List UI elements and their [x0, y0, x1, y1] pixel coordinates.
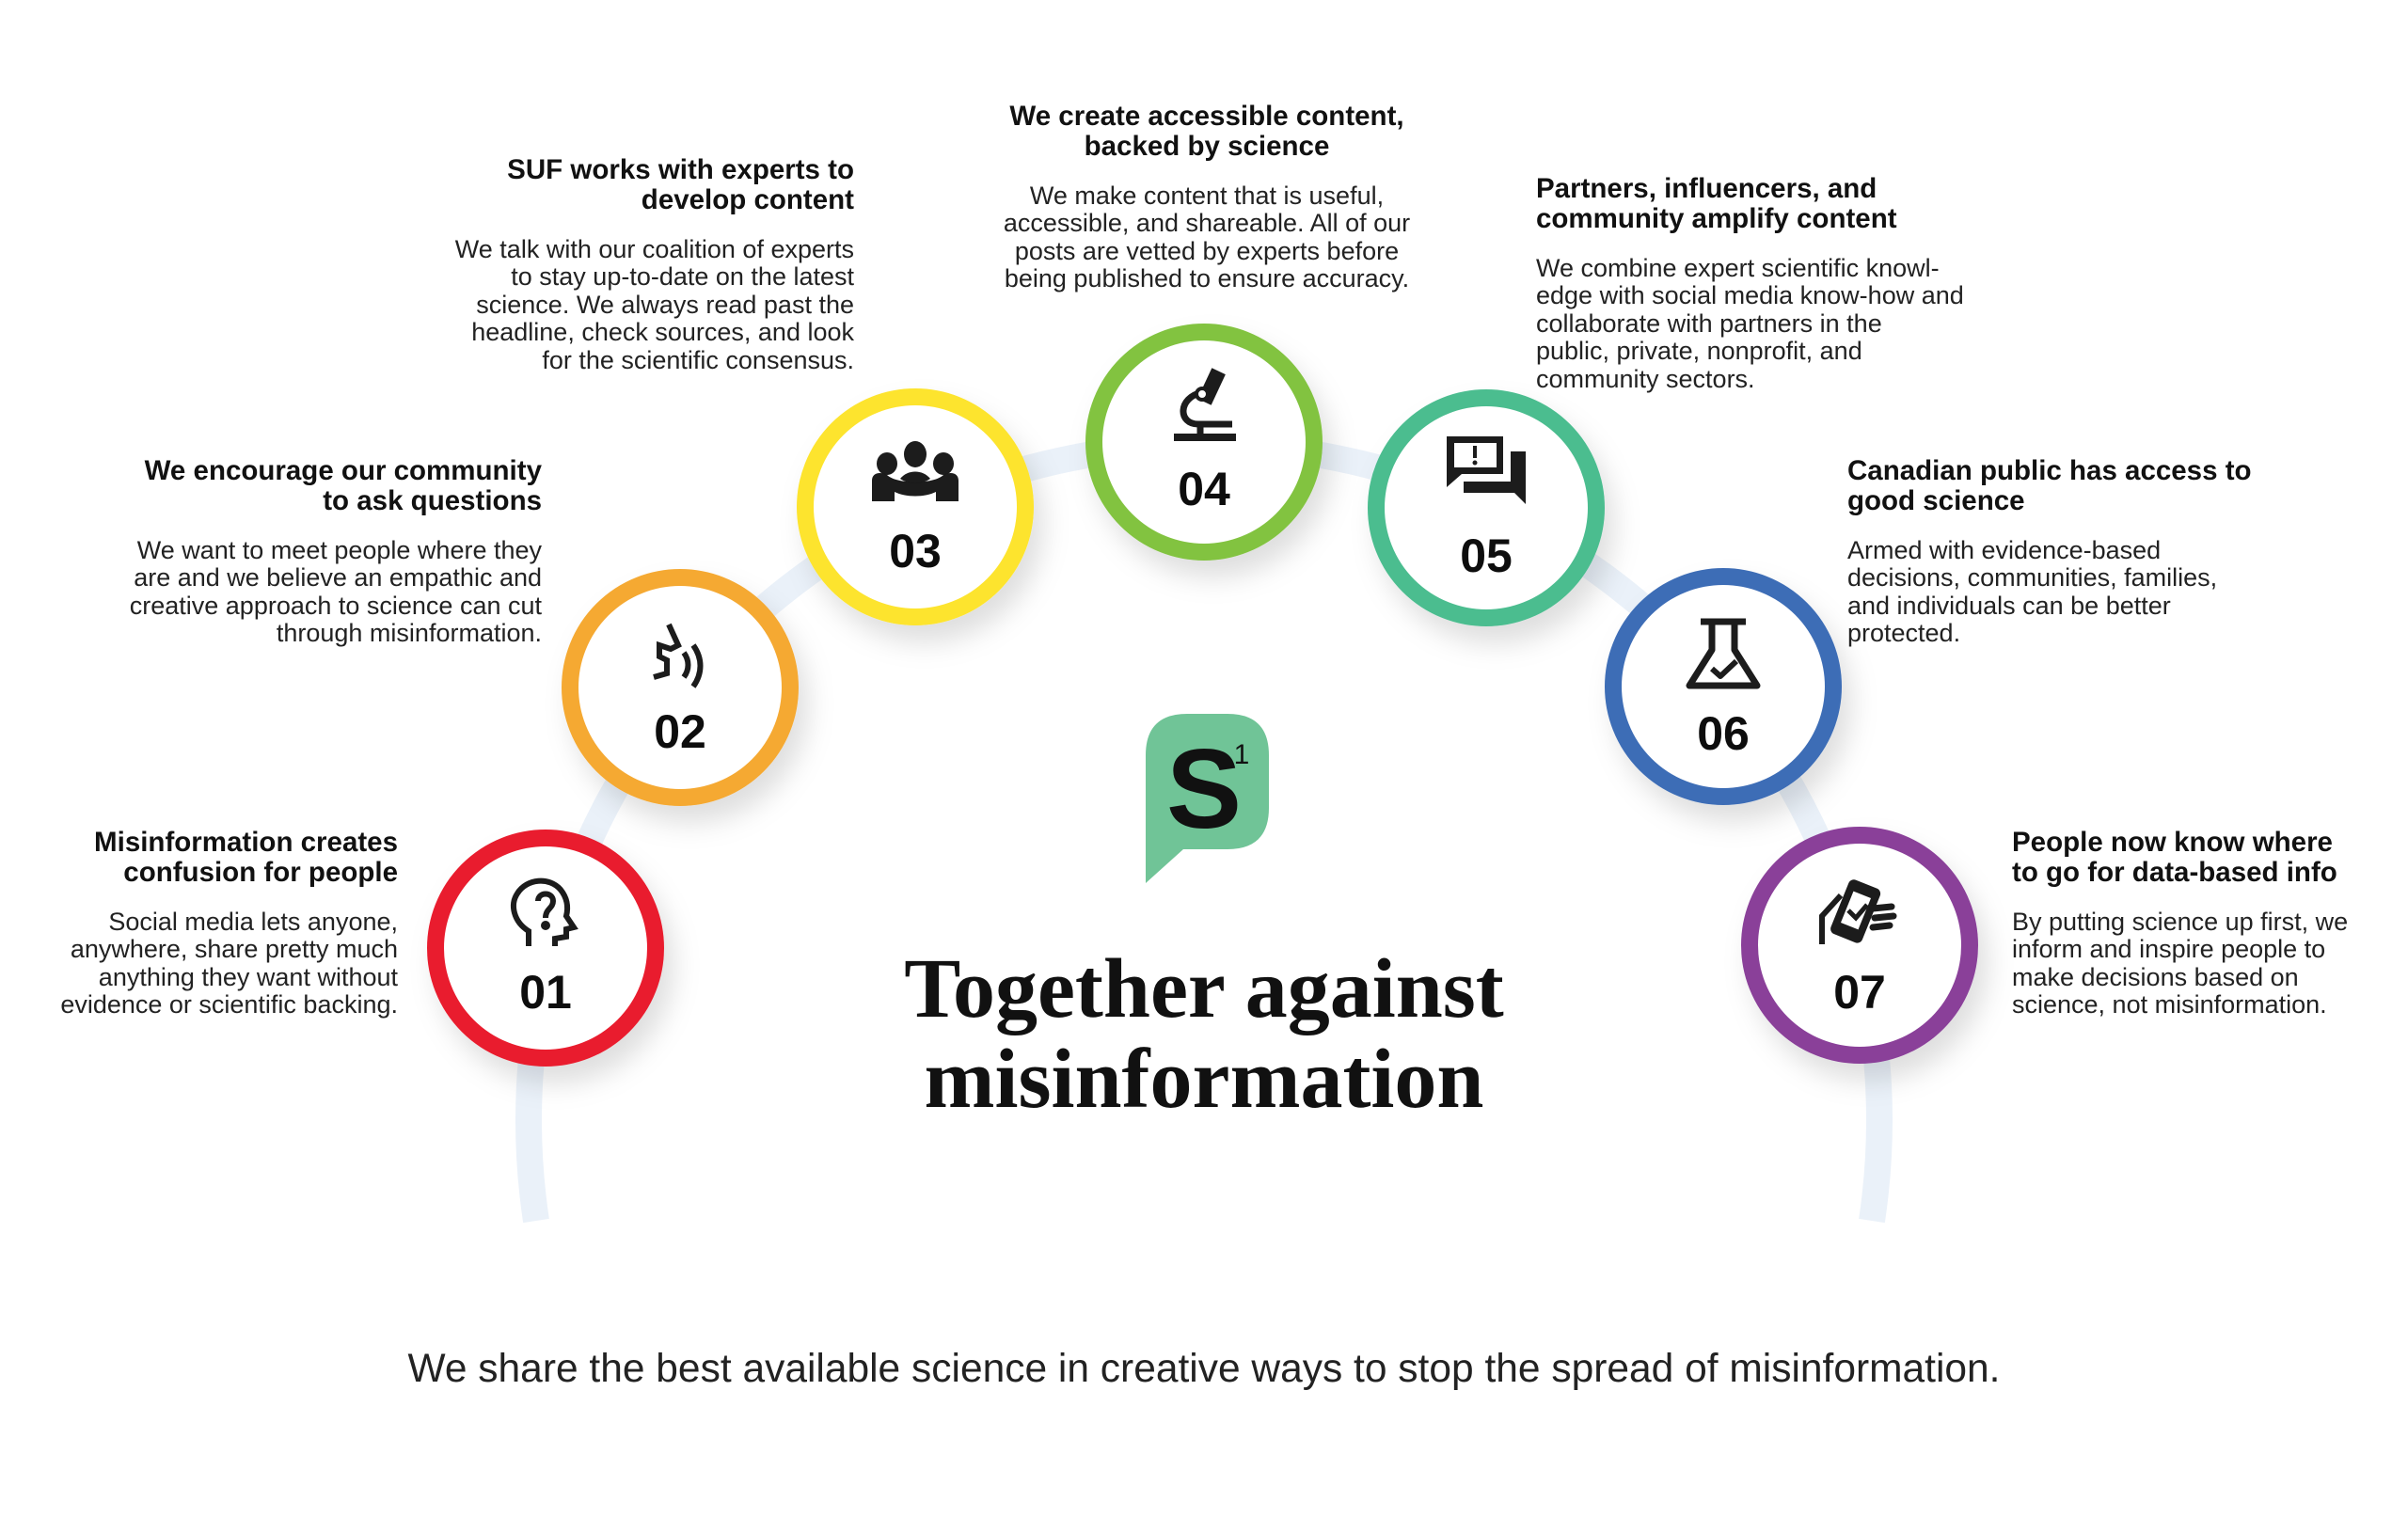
circle 02: 02	[654, 705, 706, 758]
text: step 05: We combine expert scientific knowl-	[1536, 254, 1940, 282]
text: step 07: to go for data-based info	[2012, 857, 2337, 888]
circle 01	[436, 838, 656, 1058]
icon: hand holding phone	[1822, 877, 1893, 944]
icon: flask with check	[1689, 622, 1757, 686]
text: step 04: We create accessible content,	[1009, 101, 1404, 132]
arc path	[529, 445, 1879, 1221]
text: step 07	[2012, 827, 2348, 1019]
logo	[1146, 714, 1269, 883]
text: step 04: backed by science	[1085, 131, 1329, 162]
title: Together against	[904, 942, 1504, 1035]
text: step 05: Partners, influencers, and	[1536, 173, 1877, 204]
circle 04	[1094, 332, 1314, 552]
text: step 06: decisions, communities, families,	[1847, 563, 2217, 592]
text: step 03	[455, 154, 854, 374]
text: step 04: We make content that is useful,	[1030, 182, 1384, 210]
text: step 02: creative approach to science can cut	[130, 592, 542, 620]
text: step 03: to stay up-to-date on the latest	[511, 262, 854, 291]
text: step 03: science. We always read past the	[476, 291, 854, 319]
text: step 01: Social media lets anyone,	[108, 908, 398, 936]
text: step 03: SUF works with experts to	[507, 154, 854, 185]
text: step 02: to ask questions	[323, 485, 542, 516]
text: step 05: community amplify content	[1536, 203, 1897, 234]
text: step 06	[1847, 455, 2252, 647]
text: step 02: We encourage our community	[145, 455, 542, 486]
text: step 07: People now know where	[2012, 827, 2333, 858]
text: step 02: are and we believe an empathic and	[134, 563, 542, 592]
text: step 06: Armed with evidence-based	[1847, 536, 2161, 564]
text: step 06: good science	[1847, 485, 2025, 516]
text: step 01: anything they want without	[99, 963, 398, 991]
text: step 01: Misinformation creates	[94, 827, 398, 858]
circle 03: 03	[889, 525, 942, 577]
text: step 01: evidence or scientific backing.	[60, 990, 398, 1019]
text: step 05: collaborate with partners in the	[1536, 309, 1882, 338]
text: step 05	[1536, 173, 1964, 393]
circle 06	[1613, 577, 1833, 797]
text: step 02: through misinformation.	[277, 619, 542, 647]
text: step 02	[130, 455, 542, 647]
text: step 01	[60, 827, 398, 1019]
text: step 01: confusion for people	[123, 857, 398, 888]
text: step 04: posts are vetted by experts before	[1015, 237, 1399, 265]
text: step 06: protected.	[1847, 619, 1960, 647]
text: step 07: inform and inspire people to	[2012, 935, 2325, 963]
circle 03	[805, 397, 1025, 617]
text: step 03: We talk with our coalition of experts	[455, 235, 854, 263]
icon: microscope	[1174, 368, 1236, 437]
text: step 04: accessible, and shareable. All of our	[1004, 209, 1410, 237]
text: step 03: for the scientific consensus.	[542, 346, 854, 374]
icon: speaking profile	[654, 624, 700, 687]
circle 07	[1750, 835, 1970, 1055]
icon: group of people	[872, 441, 958, 501]
circle 01: 01	[519, 966, 572, 1019]
text: step 07: science, not misinformation.	[2012, 990, 2327, 1019]
text: step 03: headline, check sources, and look	[471, 318, 854, 346]
title: misinformation	[924, 1033, 1483, 1126]
text: step 04	[1004, 101, 1410, 292]
text: step 03: develop content	[642, 184, 854, 215]
text: step 02: We want to meet people where they	[137, 536, 542, 564]
circle 06: 06	[1697, 707, 1750, 760]
text: step 07: By putting science up first, we	[2012, 908, 2348, 936]
text: step 06: and individuals can be better	[1847, 592, 2171, 620]
footer text: We share the best available science in creative ways to stop the spread of misinformation.	[408, 1347, 2000, 1391]
circle 05	[1376, 398, 1596, 618]
title	[904, 942, 1504, 1126]
text: step 05: edge with social media know-how and	[1536, 281, 1964, 309]
text: step 05: community sectors.	[1536, 365, 1755, 393]
circle 05: 05	[1460, 529, 1513, 582]
logo: 1	[1234, 739, 1249, 770]
circle 02	[570, 577, 790, 798]
circle 04: 04	[1178, 463, 1230, 515]
icon: head with question	[514, 881, 574, 946]
text: step 07: make decisions based on	[2012, 963, 2299, 991]
icon: speech bubbles with exclamation	[1447, 436, 1526, 504]
circle 07: 07	[1833, 966, 1886, 1019]
logo: S	[1166, 726, 1242, 852]
text: step 04: being published to ensure accuracy.	[1005, 264, 1409, 292]
text: step 01: anywhere, share pretty much	[71, 935, 398, 963]
text: step 05: public, private, nonprofit, and	[1536, 337, 1862, 365]
text: step 06: Canadian public has access to	[1847, 455, 2252, 486]
